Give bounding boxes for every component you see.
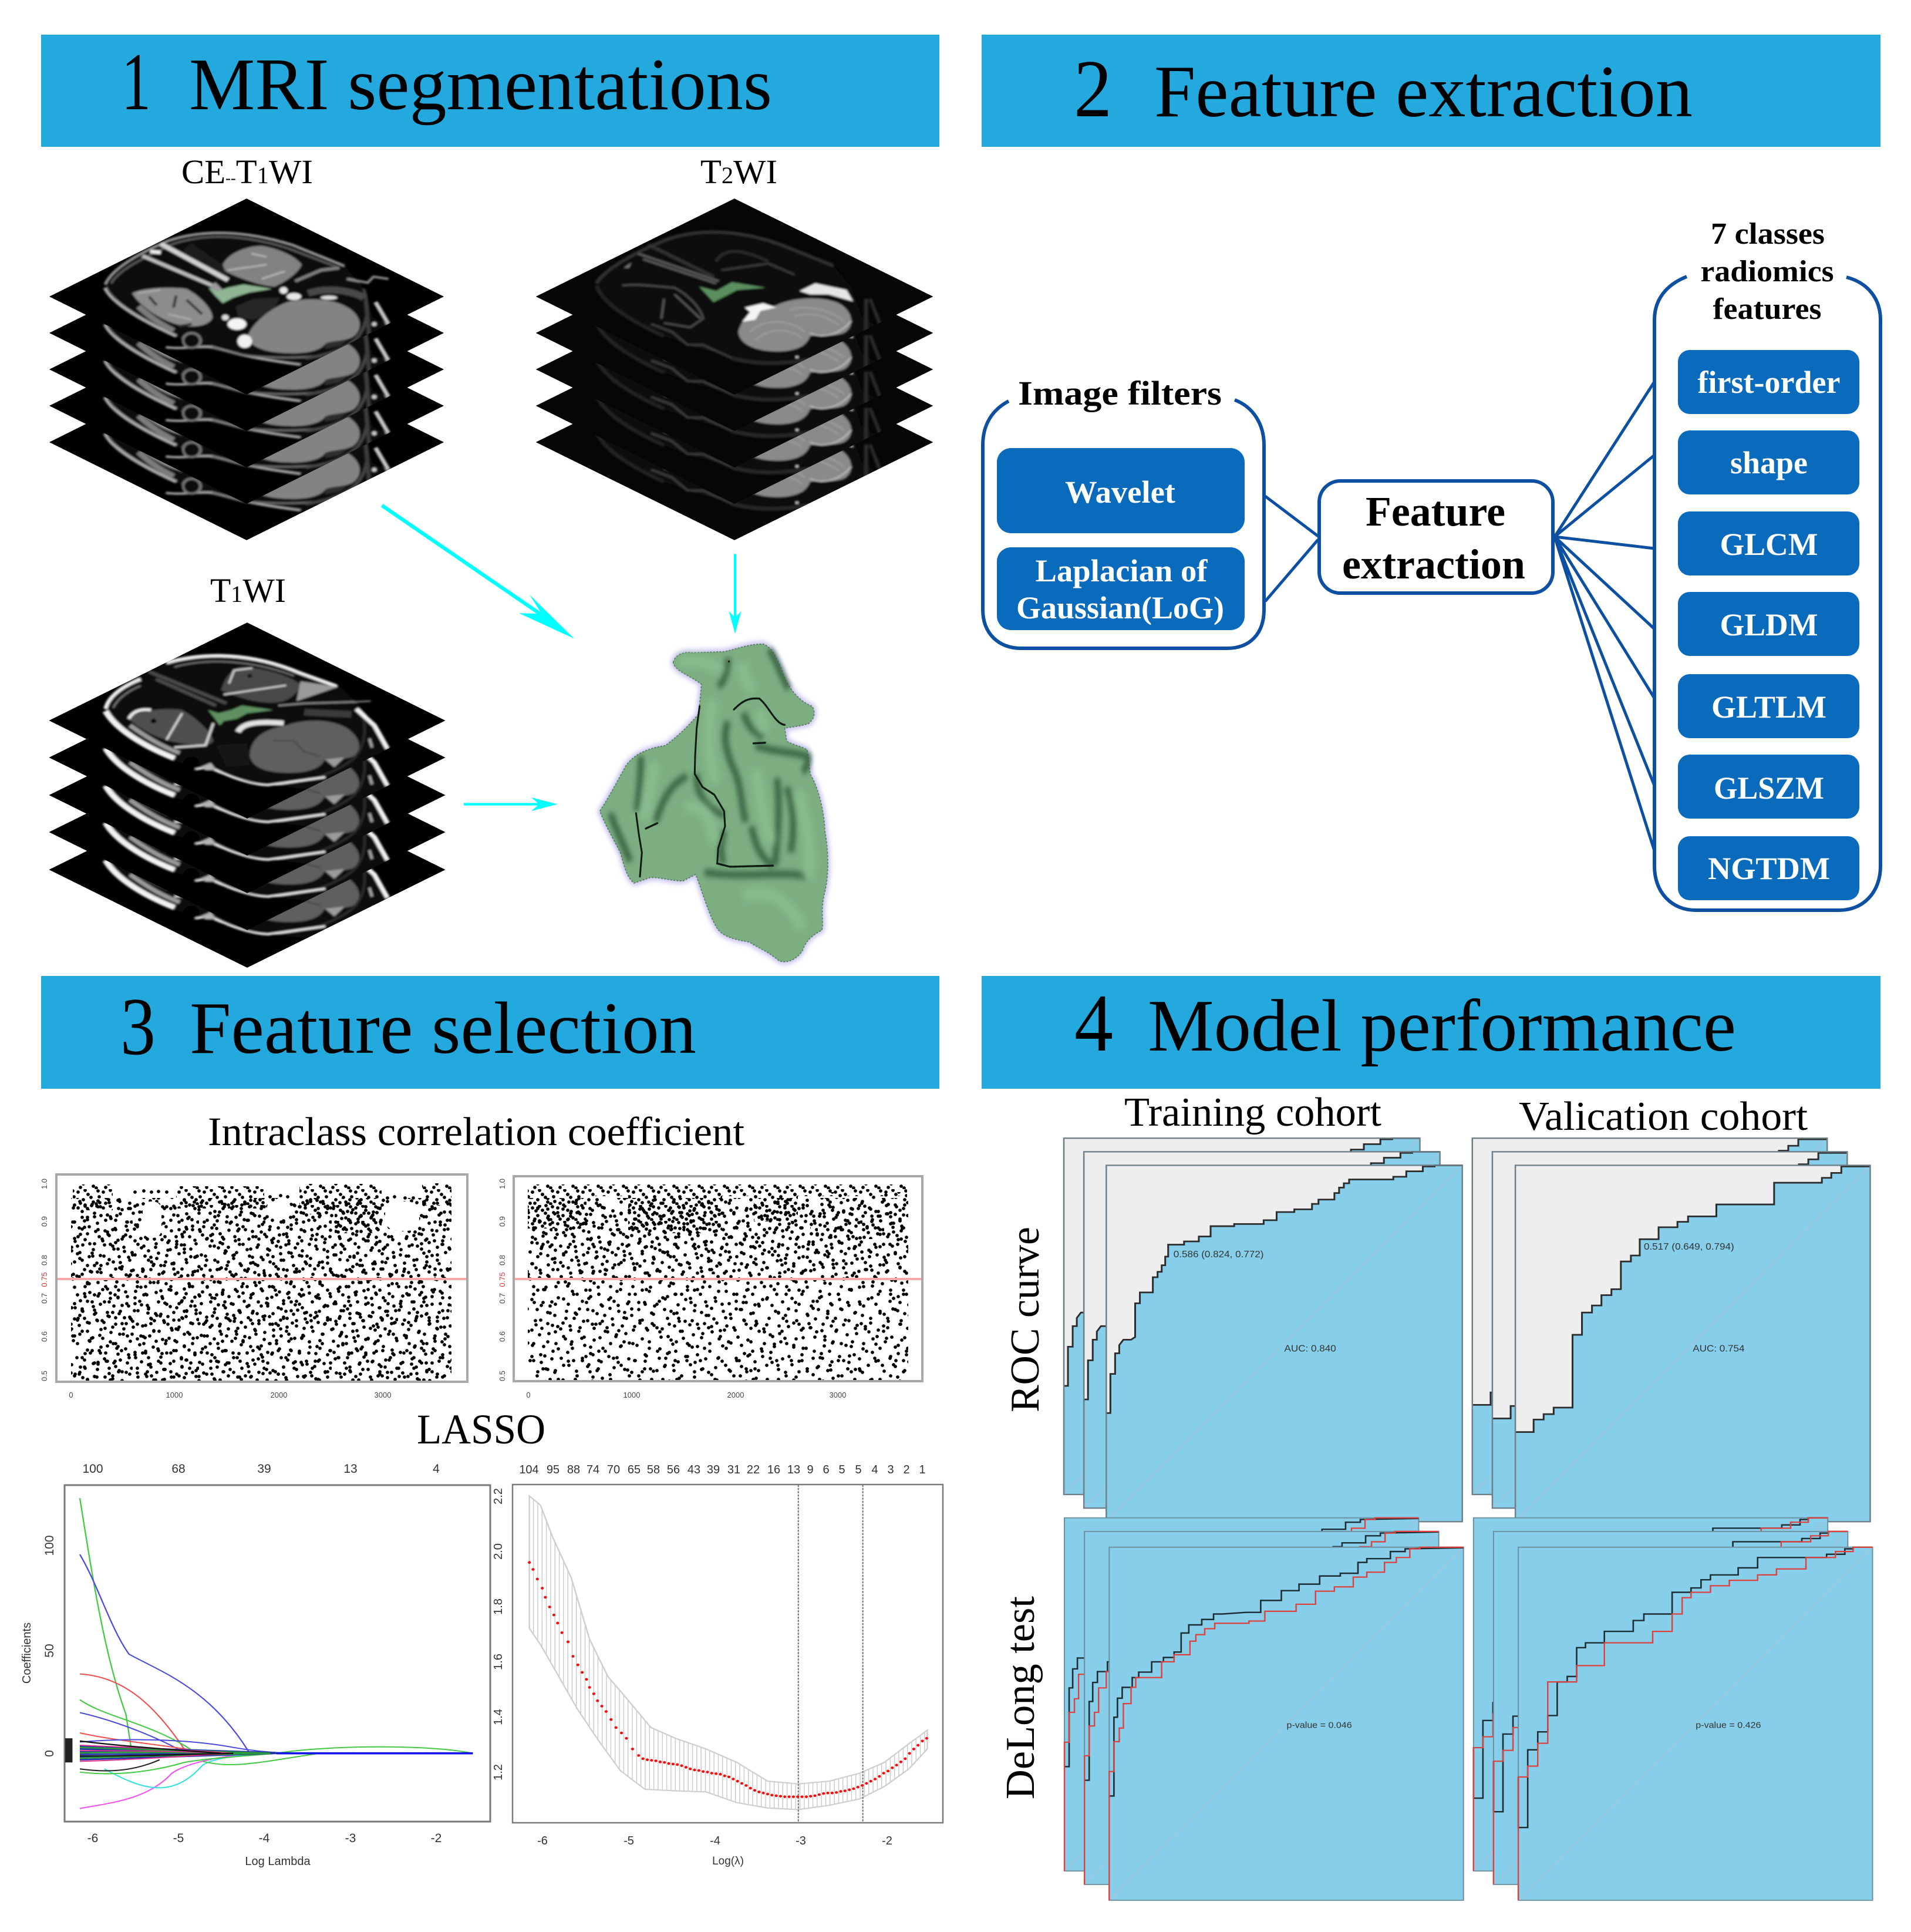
chart: LASSO coefficient paths: Log Lambda — [245, 1855, 311, 1868]
group: 7 classes radiomics features: first-order — [1698, 365, 1840, 400]
scatter plot: ICC left: 0.6 — [40, 1331, 49, 1342]
scatter plot: ICC right: 3000 — [830, 1391, 846, 1399]
scatter plot: ICC right: 1.0 — [498, 1179, 507, 1189]
3D tumour segmentation model — [600, 644, 828, 962]
scatter plot: ICC left: 0 — [69, 1391, 73, 1399]
connectors: feature extraction to feature classes — [1555, 382, 1654, 851]
chart: LASSO coefficient paths: 0 — [43, 1750, 56, 1757]
chart: LASSO cross-validation curve: 43 — [687, 1463, 700, 1476]
chart: LASSO coefficient paths: -3 — [345, 1832, 356, 1845]
chart: LASSO cross-validation curve: 88 — [567, 1463, 580, 1476]
node: feature extraction: Feature — [1366, 488, 1505, 535]
scatter plot: ICC right: 0 — [526, 1391, 531, 1399]
label: T1WI: T1WI — [210, 571, 286, 610]
scatter plot: ICC left: 0.9 — [40, 1216, 49, 1227]
chart: LASSO cross-validation curve: -4 — [710, 1835, 720, 1847]
chart: LASSO cross-validation curve: 56 — [667, 1463, 680, 1476]
chart: LASSO cross-validation curve: 4 — [871, 1463, 878, 1476]
label: T2WI: T2WI — [700, 153, 777, 191]
chart: LASSO coefficient paths: 4 — [433, 1462, 440, 1476]
chart: LASSO cross-validation curve: 104 — [519, 1463, 539, 1476]
scatter plot: ICC right: 0.6 — [498, 1331, 507, 1342]
scatter plot: ICC left: 1.0 — [40, 1179, 49, 1189]
label: CE-T1WI: CE--T1WI — [181, 153, 313, 191]
row label: DeLong test: DeLong test — [998, 1596, 1043, 1799]
arrow: T2WI to tumour model — [729, 554, 742, 634]
chart: LASSO cross-validation curve: 1 — [919, 1463, 926, 1476]
heading: 4 Model performance — [982, 976, 1880, 1089]
column label: Validation cohort: Valication cohort — [1519, 1094, 1808, 1139]
chart: LASSO coefficient paths — [21, 1462, 490, 1868]
scatter plot: ICC left: 0.5 — [40, 1371, 49, 1381]
group: image filters: Wavelet — [1065, 474, 1175, 510]
image stack: T2WI slices — [536, 198, 933, 540]
scatter plot: ICC right: 0.8 — [498, 1255, 507, 1265]
panel 4: Model performance — [982, 976, 1880, 1900]
ROC curves: validation cohort — [1472, 1138, 1870, 1522]
chart: LASSO cross-validation curve: 6 — [823, 1463, 830, 1476]
group: image filters: Laplacian of — [1036, 553, 1208, 588]
column label: Training cohort: Training cohort — [1124, 1090, 1382, 1135]
chart: LASSO cross-validation curve: 5 — [838, 1463, 845, 1476]
chart: LASSO cross-validation curve: 2.0 — [492, 1543, 505, 1560]
chart: LASSO cross-validation curve: 1.6 — [492, 1654, 505, 1670]
chart: LASSO coefficient paths: 68 — [171, 1462, 186, 1476]
panel 3: Feature selection — [21, 976, 943, 1868]
chart: LASSO cross-validation curve: 22 — [747, 1463, 760, 1476]
scatter plot: ICC right: 0.75 — [498, 1272, 507, 1287]
scatter plot: ICC left: 0.75 — [40, 1272, 49, 1287]
group: 7 classes radiomics features: GLTLM — [1711, 689, 1826, 725]
chart: LASSO cross-validation curve: 58 — [647, 1463, 660, 1476]
scatter plot: ICC right: 2000 — [727, 1391, 744, 1399]
chart: LASSO coefficient paths: 13 — [343, 1462, 358, 1476]
heading: 3 Feature selection: Feature selection — [190, 988, 696, 1069]
chart: LASSO cross-validation curve: 13 — [787, 1463, 800, 1476]
heading: 4 Model performance: 4 — [1074, 978, 1113, 1069]
heading: 4 Model performance: Model performance — [1148, 985, 1736, 1067]
chart: LASSO coefficient paths: 50 — [43, 1644, 56, 1658]
group: 7 classes radiomics features: shape — [1730, 445, 1808, 480]
chart: LASSO cross-validation curve: 16 — [767, 1463, 780, 1476]
chart: LASSO coefficient paths: Coefficients — [21, 1623, 33, 1684]
heading: 2 Feature extraction: 2 — [1074, 43, 1112, 134]
heading: 3 Feature selection — [41, 976, 939, 1089]
DeLong test curves: training cohort — [1064, 1518, 1464, 1900]
node: feature extraction: extraction — [1342, 541, 1525, 588]
scatter plot: ICC left: 1000 — [166, 1391, 183, 1399]
chart: LASSO cross-validation curve: 74 — [587, 1463, 599, 1476]
scatter plot: ICC right: 0.7 — [498, 1293, 507, 1304]
chart: LASSO cross-validation curve — [492, 1463, 943, 1867]
group: 7 classes radiomics features: NGTDM — [1708, 851, 1830, 886]
scatter plot: ICC right: 0.9 — [498, 1216, 507, 1227]
chart: LASSO coefficient paths: -6 — [87, 1832, 98, 1845]
heading: 1 MRI segmentations: 1 — [122, 36, 151, 127]
heading: 1 MRI segmentations — [41, 35, 939, 147]
node: feature extraction — [1319, 481, 1553, 593]
image stack: CE-T1WI slices — [49, 198, 444, 540]
row label: ROC curve: ROC curve — [1003, 1227, 1048, 1412]
heading: 2 Feature extraction — [982, 35, 1880, 147]
chart: LASSO cross-validation curve: -5 — [623, 1835, 634, 1847]
scatter plot: ICC left: 0.7 — [40, 1293, 49, 1304]
heading: 1 MRI segmentations: MRI segmentations — [189, 44, 772, 126]
chart: LASSO cross-validation curve: 5 — [855, 1463, 862, 1476]
group: 7 classes radiomics features: radiomics — [1700, 255, 1834, 288]
chart: LASSO cross-validation curve: 1.4 — [492, 1709, 505, 1725]
scatter plot: ICC right: 0.5 — [498, 1371, 507, 1381]
group: 7 classes radiomics features — [1654, 217, 1880, 910]
group: 7 classes radiomics features: features — [1713, 292, 1821, 326]
scatter plot: ICC right: 1000 — [623, 1391, 640, 1399]
arrow: T1WI to tumour model — [464, 797, 558, 811]
group: 7 classes radiomics features: 7 classes — [1711, 217, 1825, 251]
heading: 3 Feature selection: 3 — [120, 981, 156, 1072]
chart: LASSO cross-validation curve: 1.2 — [492, 1764, 505, 1780]
ROC curves: training cohort — [1064, 1138, 1462, 1522]
subheading: LASSO: LASSO — [417, 1406, 545, 1453]
chart: LASSO coefficient paths: 100 — [43, 1535, 56, 1556]
chart: LASSO coefficient paths: 39 — [257, 1462, 271, 1476]
chart: LASSO cross-validation curve: 1.8 — [492, 1598, 505, 1615]
chart: LASSO cross-validation curve: 31 — [727, 1463, 740, 1476]
chart: LASSO cross-validation curve: Log(λ) — [712, 1855, 744, 1867]
group: 7 classes radiomics features: GLDM — [1720, 607, 1818, 642]
chart: LASSO cross-validation curve: 65 — [628, 1463, 641, 1476]
subheading: Intraclass correlation coefficient: Intraclass correlation coefficient — [208, 1109, 744, 1154]
scatter plot: ICC left: 2000 — [271, 1391, 287, 1399]
scatter plot: ICC left: 3000 — [375, 1391, 391, 1399]
chart: LASSO coefficient paths: -4 — [259, 1832, 270, 1845]
group: image filters: Image filters — [1018, 374, 1222, 412]
chart: LASSO coefficient paths: -5 — [173, 1832, 184, 1845]
DeLong test curves: validation cohort — [1474, 1518, 1873, 1900]
chart: LASSO cross-validation curve: 2 — [903, 1463, 910, 1476]
scatter plot: ICC left: 0.8 — [40, 1255, 49, 1265]
chart: LASSO cross-validation curve: 95 — [547, 1463, 560, 1476]
chart: LASSO cross-validation curve: 9 — [807, 1463, 814, 1476]
chart: LASSO cross-validation curve: 39 — [707, 1463, 720, 1476]
chart: LASSO cross-validation curve: 3 — [887, 1463, 894, 1476]
scatter plot: ICC right — [498, 1176, 922, 1399]
group: image filters: Gaussian(LoG) — [1016, 590, 1224, 625]
panel 1: MRI segmentations — [41, 35, 939, 968]
scatter plot: ICC left — [40, 1174, 467, 1399]
panel 2: Feature extraction — [982, 35, 1880, 910]
chart: LASSO coefficient paths: -2 — [431, 1832, 441, 1845]
chart: LASSO cross-validation curve: -2 — [882, 1835, 892, 1847]
heading: 2 Feature extraction: Feature extraction — [1154, 51, 1693, 133]
chart: LASSO cross-validation curve: -6 — [537, 1835, 548, 1847]
group: image filters — [983, 374, 1264, 648]
image stack: T1WI slices — [49, 622, 446, 968]
arrow: CE-T1WI to tumour model — [382, 506, 574, 639]
chart: LASSO cross-validation curve: 70 — [607, 1463, 620, 1476]
group: 7 classes radiomics features: GLCM — [1720, 527, 1818, 562]
connectors: filters to feature extraction — [1265, 496, 1318, 601]
chart: LASSO coefficient paths: 100 — [82, 1462, 103, 1476]
chart: LASSO cross-validation curve: 2.2 — [492, 1488, 505, 1504]
chart: LASSO cross-validation curve: -3 — [796, 1835, 806, 1847]
group: 7 classes radiomics features: GLSZM — [1714, 770, 1824, 806]
